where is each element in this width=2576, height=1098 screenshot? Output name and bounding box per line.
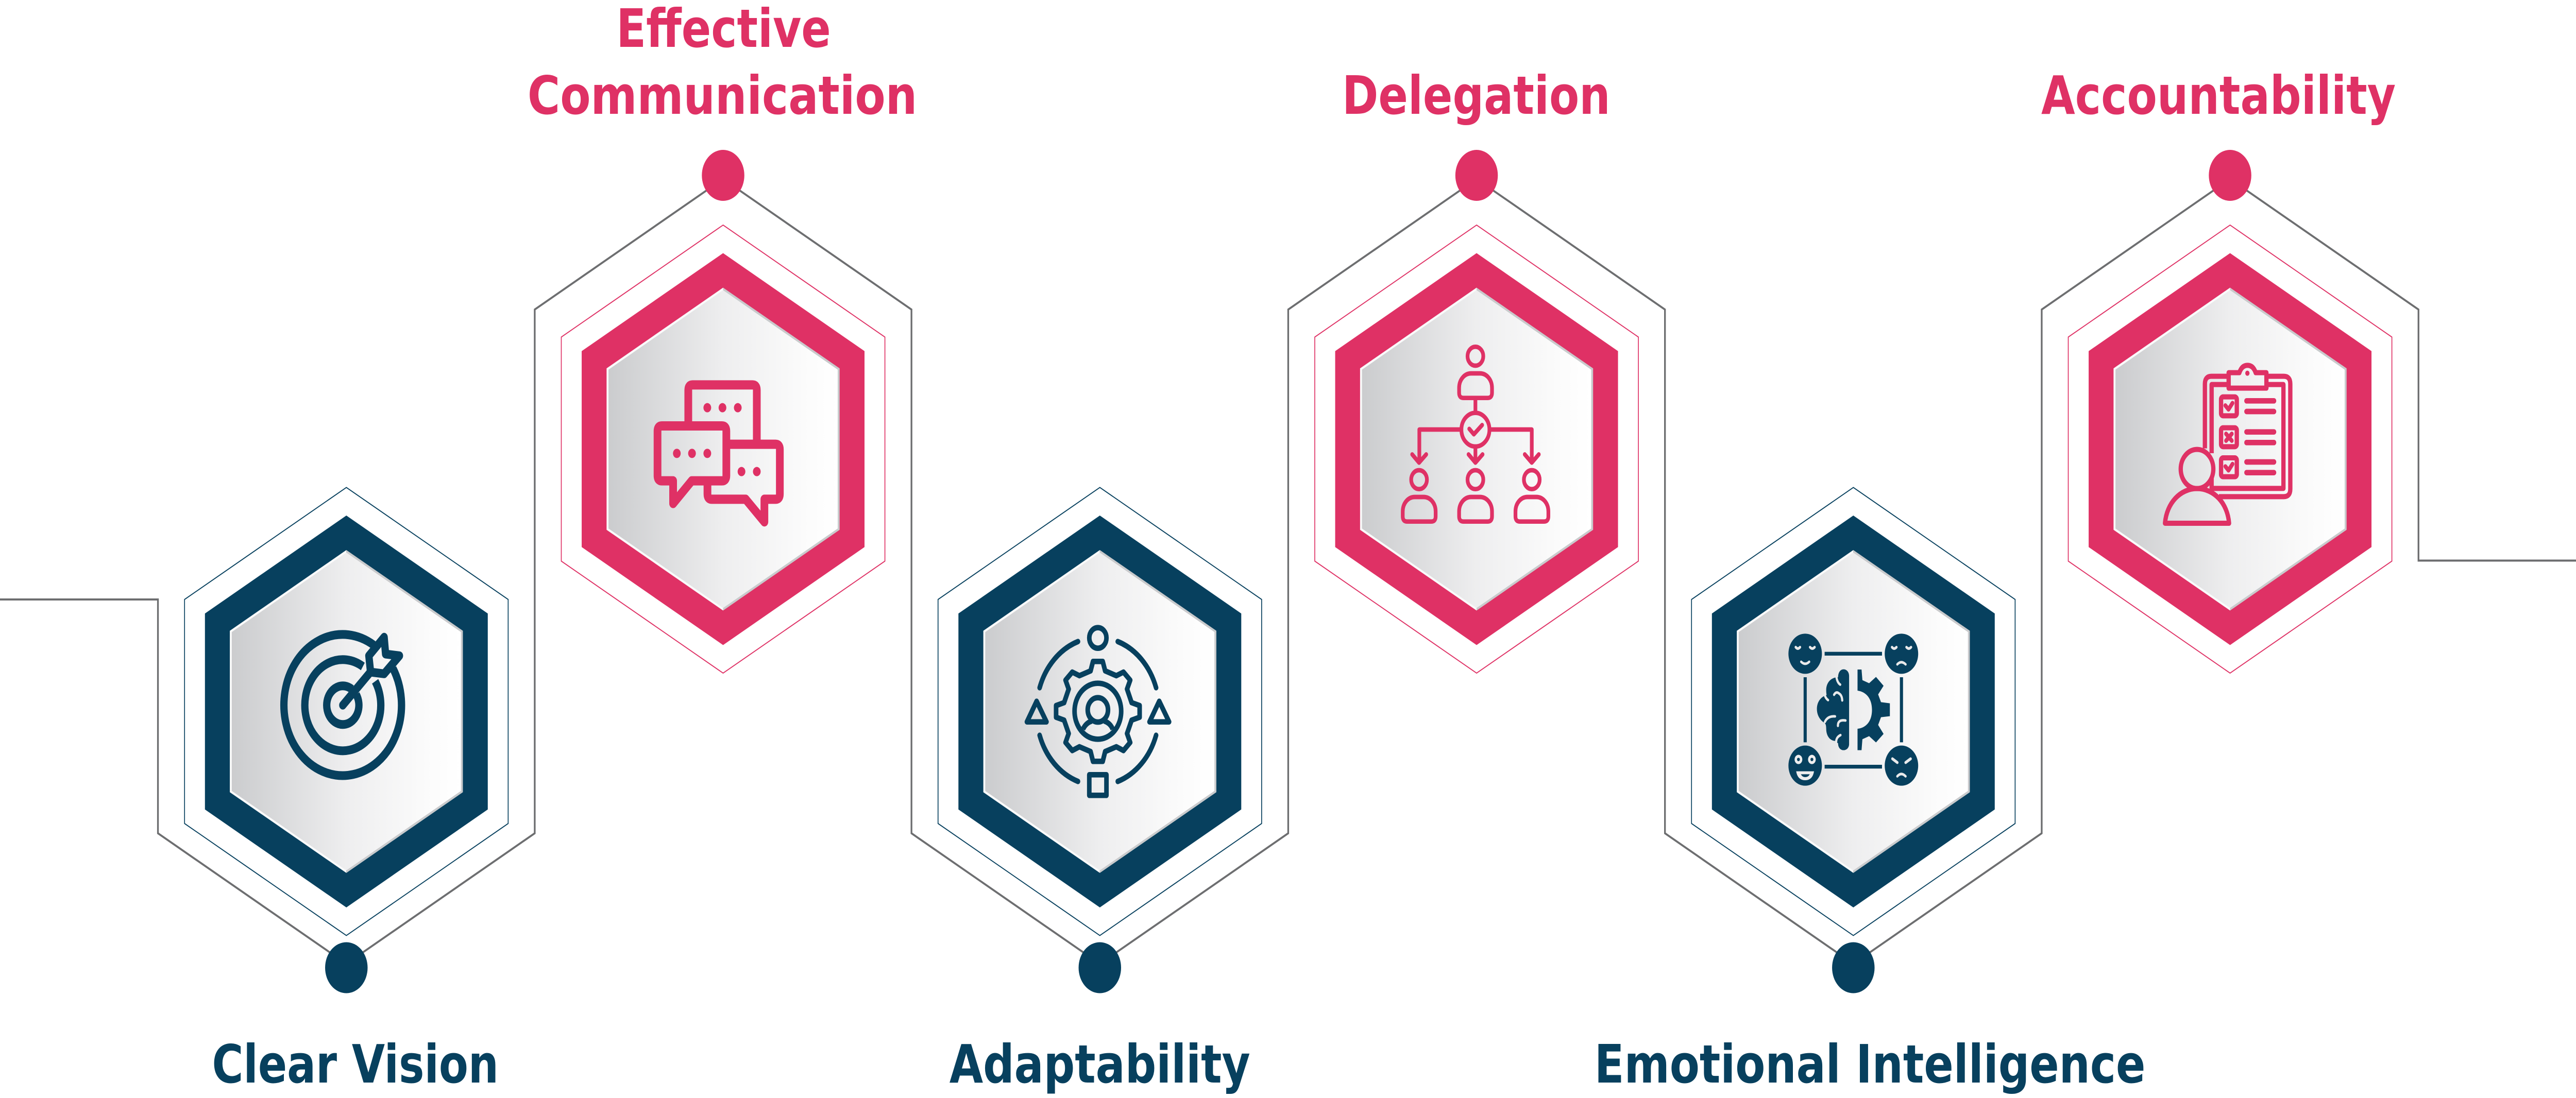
panel: delegation (1315, 65, 1638, 673)
panel: clear vision (184, 487, 508, 1095)
label: effective communication: Effective (616, 0, 831, 60)
dot: delegation (1455, 150, 1498, 201)
dot: emotional intelligence (1832, 942, 1875, 993)
hexagon: accountability (2068, 225, 2392, 673)
label: accountability: Accountability (2041, 65, 2396, 127)
label: emotional intelligence: Emotional Intelligence (1595, 1034, 2145, 1095)
hexagon: delegation (1315, 225, 1638, 673)
label: clear vision: Clear Vision (212, 1034, 499, 1095)
dot: adaptability (1079, 942, 1121, 993)
label: effective communication (528, 0, 917, 127)
icon: target with arrow (284, 634, 401, 776)
label: effective communication: Communication (528, 65, 917, 127)
hexagon: effective communication (561, 225, 885, 673)
connector line weaving through hexagons (0, 179, 2576, 964)
hexagon: emotional intelligence (1691, 487, 2015, 935)
label: adaptability: Adaptability (950, 1034, 1250, 1095)
icon: delegation hierarchy (1403, 347, 1548, 522)
panel: effective communication (528, 0, 917, 673)
icon: brain, gear and emotion faces (1788, 633, 1918, 786)
panel: emotional intelligence (1595, 487, 2145, 1095)
dot: effective communication (702, 150, 744, 201)
panel: adaptability (938, 487, 1262, 1095)
panel: accountability (2041, 65, 2396, 673)
icon: gear with person and shapes (1027, 628, 1169, 795)
icon: chat bubbles (657, 385, 780, 522)
hexagon: adaptability (938, 487, 1262, 935)
icon: clipboard checklist with person (2165, 365, 2290, 523)
dot: accountability (2209, 150, 2251, 201)
hexagon: clear vision (184, 487, 508, 935)
dot: clear vision (325, 942, 368, 993)
label: delegation: Delegation (1342, 65, 1611, 127)
